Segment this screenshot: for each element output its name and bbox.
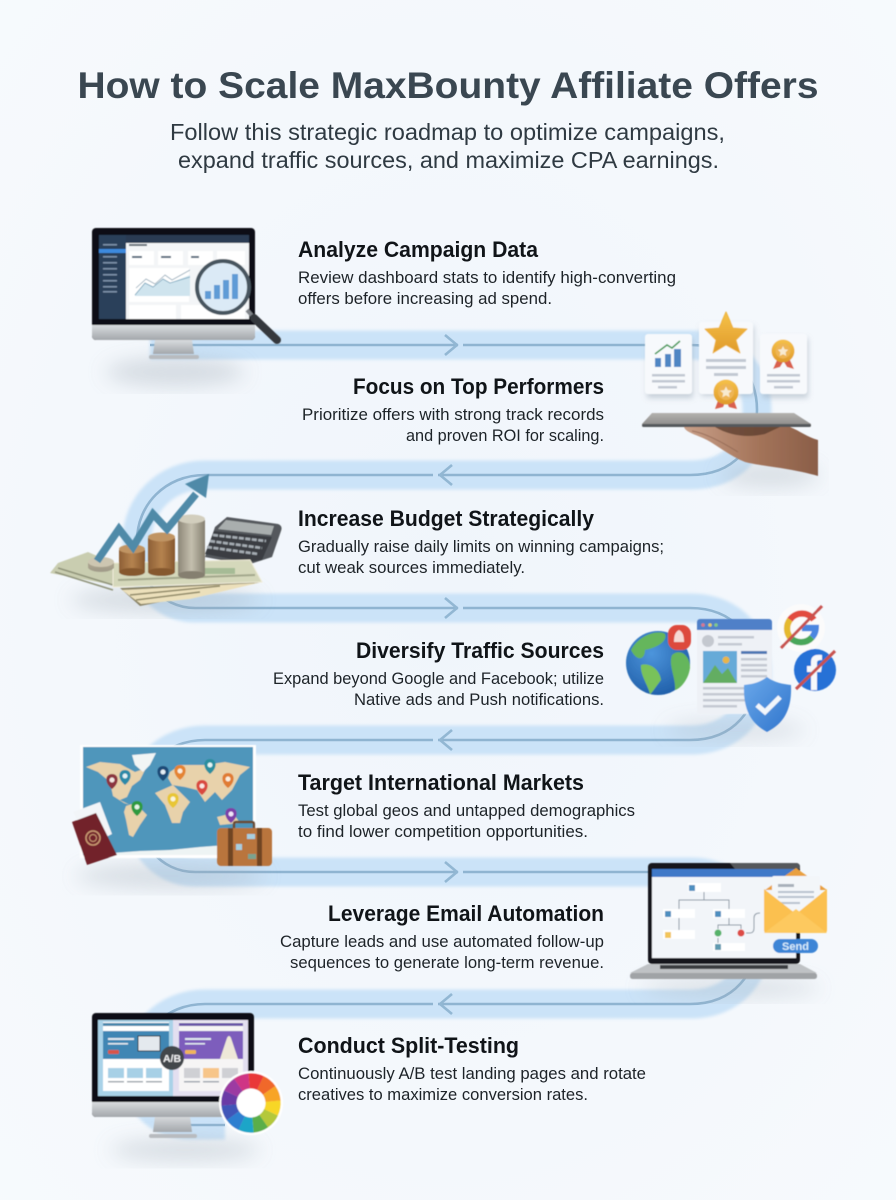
arrow chevrons bbox=[440, 335, 457, 1014]
step 4 text: Diversify Traffic Sources bbox=[273, 638, 604, 709]
step 3 text: Increase Budget Strategically: cut weak sources immediately. bbox=[298, 559, 525, 577]
map pins bbox=[106, 759, 237, 823]
subtitle bbox=[170, 119, 725, 173]
subtitle: Follow this strategic roadmap to optimize campaigns, bbox=[170, 119, 725, 145]
step 1 text: Analyze Campaign Data: Review dashboard stats to identify high-converting bbox=[298, 269, 676, 287]
step 7 text: Conduct Split-Testing bbox=[298, 1033, 646, 1104]
subtitle: expand traffic sources, and maximize CPA earnings. bbox=[178, 147, 719, 173]
step 5 text: Target International Markets: Target International Markets bbox=[298, 770, 584, 795]
step 5 text: Target International Markets bbox=[298, 770, 635, 841]
step 6 text: Leverage Email Automation: Capture leads and use automated follow-up bbox=[280, 933, 604, 951]
banknotes bbox=[50, 552, 262, 606]
send button: Send bbox=[782, 941, 809, 953]
step 6 text: Leverage Email Automation: sequences to generate long-term revenue. bbox=[290, 954, 604, 972]
icon: laptop with email automation flow bbox=[630, 863, 827, 997]
globe bbox=[626, 631, 690, 695]
title: How to Scale MaxBounty Affiliate Offers bbox=[78, 65, 818, 106]
calculator bbox=[205, 517, 282, 565]
automation flow bbox=[663, 883, 760, 951]
step 3 text: Increase Budget Strategically bbox=[298, 506, 664, 577]
icon: cash, coins, calculator and growth arrow bbox=[50, 474, 282, 612]
icon: A/B test monitor with colour wheel bbox=[92, 1013, 283, 1161]
growth arrow bbox=[97, 494, 196, 561]
icon: world map with pins, passport and suitcase bbox=[72, 745, 272, 888]
passport bbox=[72, 802, 117, 865]
ad window bbox=[697, 619, 772, 714]
step 7 text: Conduct Split-Testing: Conduct Split-Testing bbox=[298, 1033, 519, 1058]
step 6 text: Leverage Email Automation bbox=[280, 901, 604, 972]
step 2 text: Focus on Top Performers: Prioritize offers with strong track records bbox=[302, 406, 604, 424]
envelope bbox=[764, 868, 827, 933]
colour wheel bbox=[219, 1071, 283, 1135]
google circle bbox=[777, 604, 825, 652]
step 1 text: Analyze Campaign Data: Analyze Campaign Data bbox=[298, 237, 539, 262]
hand bbox=[684, 427, 818, 476]
suitcase bbox=[217, 822, 272, 866]
icon: dashboard monitor with magnifier bbox=[92, 228, 277, 386]
coin stacks bbox=[88, 514, 205, 579]
step 2 text: Focus on Top Performers: Focus on Top Performers bbox=[353, 374, 604, 399]
card: medal bbox=[760, 334, 807, 394]
card: star bbox=[699, 312, 753, 409]
step 1 text: Analyze Campaign Data bbox=[298, 237, 676, 308]
step 4 text: Diversify Traffic Sources: Diversify Traffic Sources bbox=[356, 638, 604, 663]
step 4 text: Diversify Traffic Sources: Native ads and Push notifications. bbox=[354, 691, 604, 709]
step 6 text: Leverage Email Automation: Leverage Email Automation bbox=[328, 901, 604, 926]
step 3 text: Increase Budget Strategically: Gradually raise daily limits on winning campaigns; bbox=[298, 538, 664, 556]
step 2 text: Focus on Top Performers bbox=[302, 374, 604, 445]
gaps beside arrows bbox=[433, 345, 463, 1004]
step 4 text: Diversify Traffic Sources: Expand beyond Google and Facebook; utilize bbox=[273, 670, 604, 688]
card: growth chart bbox=[645, 334, 692, 394]
step 7 text: Conduct Split-Testing: creatives to maximize conversion rates. bbox=[298, 1086, 588, 1104]
step 5 text: Target International Markets: to find lower competition opportunities. bbox=[298, 823, 588, 841]
notification bell bbox=[668, 625, 691, 650]
step 1 text: Analyze Campaign Data: offers before increasing ad spend. bbox=[298, 290, 552, 308]
shield bbox=[744, 677, 791, 732]
A/B badge bbox=[160, 1046, 184, 1070]
icon: globe, ad window, shield and blocked networks bbox=[626, 604, 836, 740]
monitor bbox=[92, 1013, 254, 1138]
laptop bbox=[630, 863, 817, 979]
tablet bbox=[642, 413, 811, 427]
world map bbox=[80, 745, 256, 858]
step 3 text: Increase Budget Strategically: Increase Budget Strategically bbox=[298, 506, 595, 531]
send button bbox=[773, 939, 818, 953]
step 2 text: Focus on Top Performers: and proven ROI for scaling. bbox=[406, 427, 604, 445]
facebook circle bbox=[794, 649, 836, 691]
A/B badge: A/B bbox=[163, 1053, 181, 1065]
step 5 text: Target International Markets: Test global geos and untapped demographics bbox=[298, 802, 635, 820]
roadmap path bbox=[137, 335, 757, 1125]
step 7 text: Conduct Split-Testing: Continuously A/B test landing pages and rotate bbox=[298, 1065, 646, 1083]
icon: hand holding tablet with award cards bbox=[642, 312, 820, 487]
